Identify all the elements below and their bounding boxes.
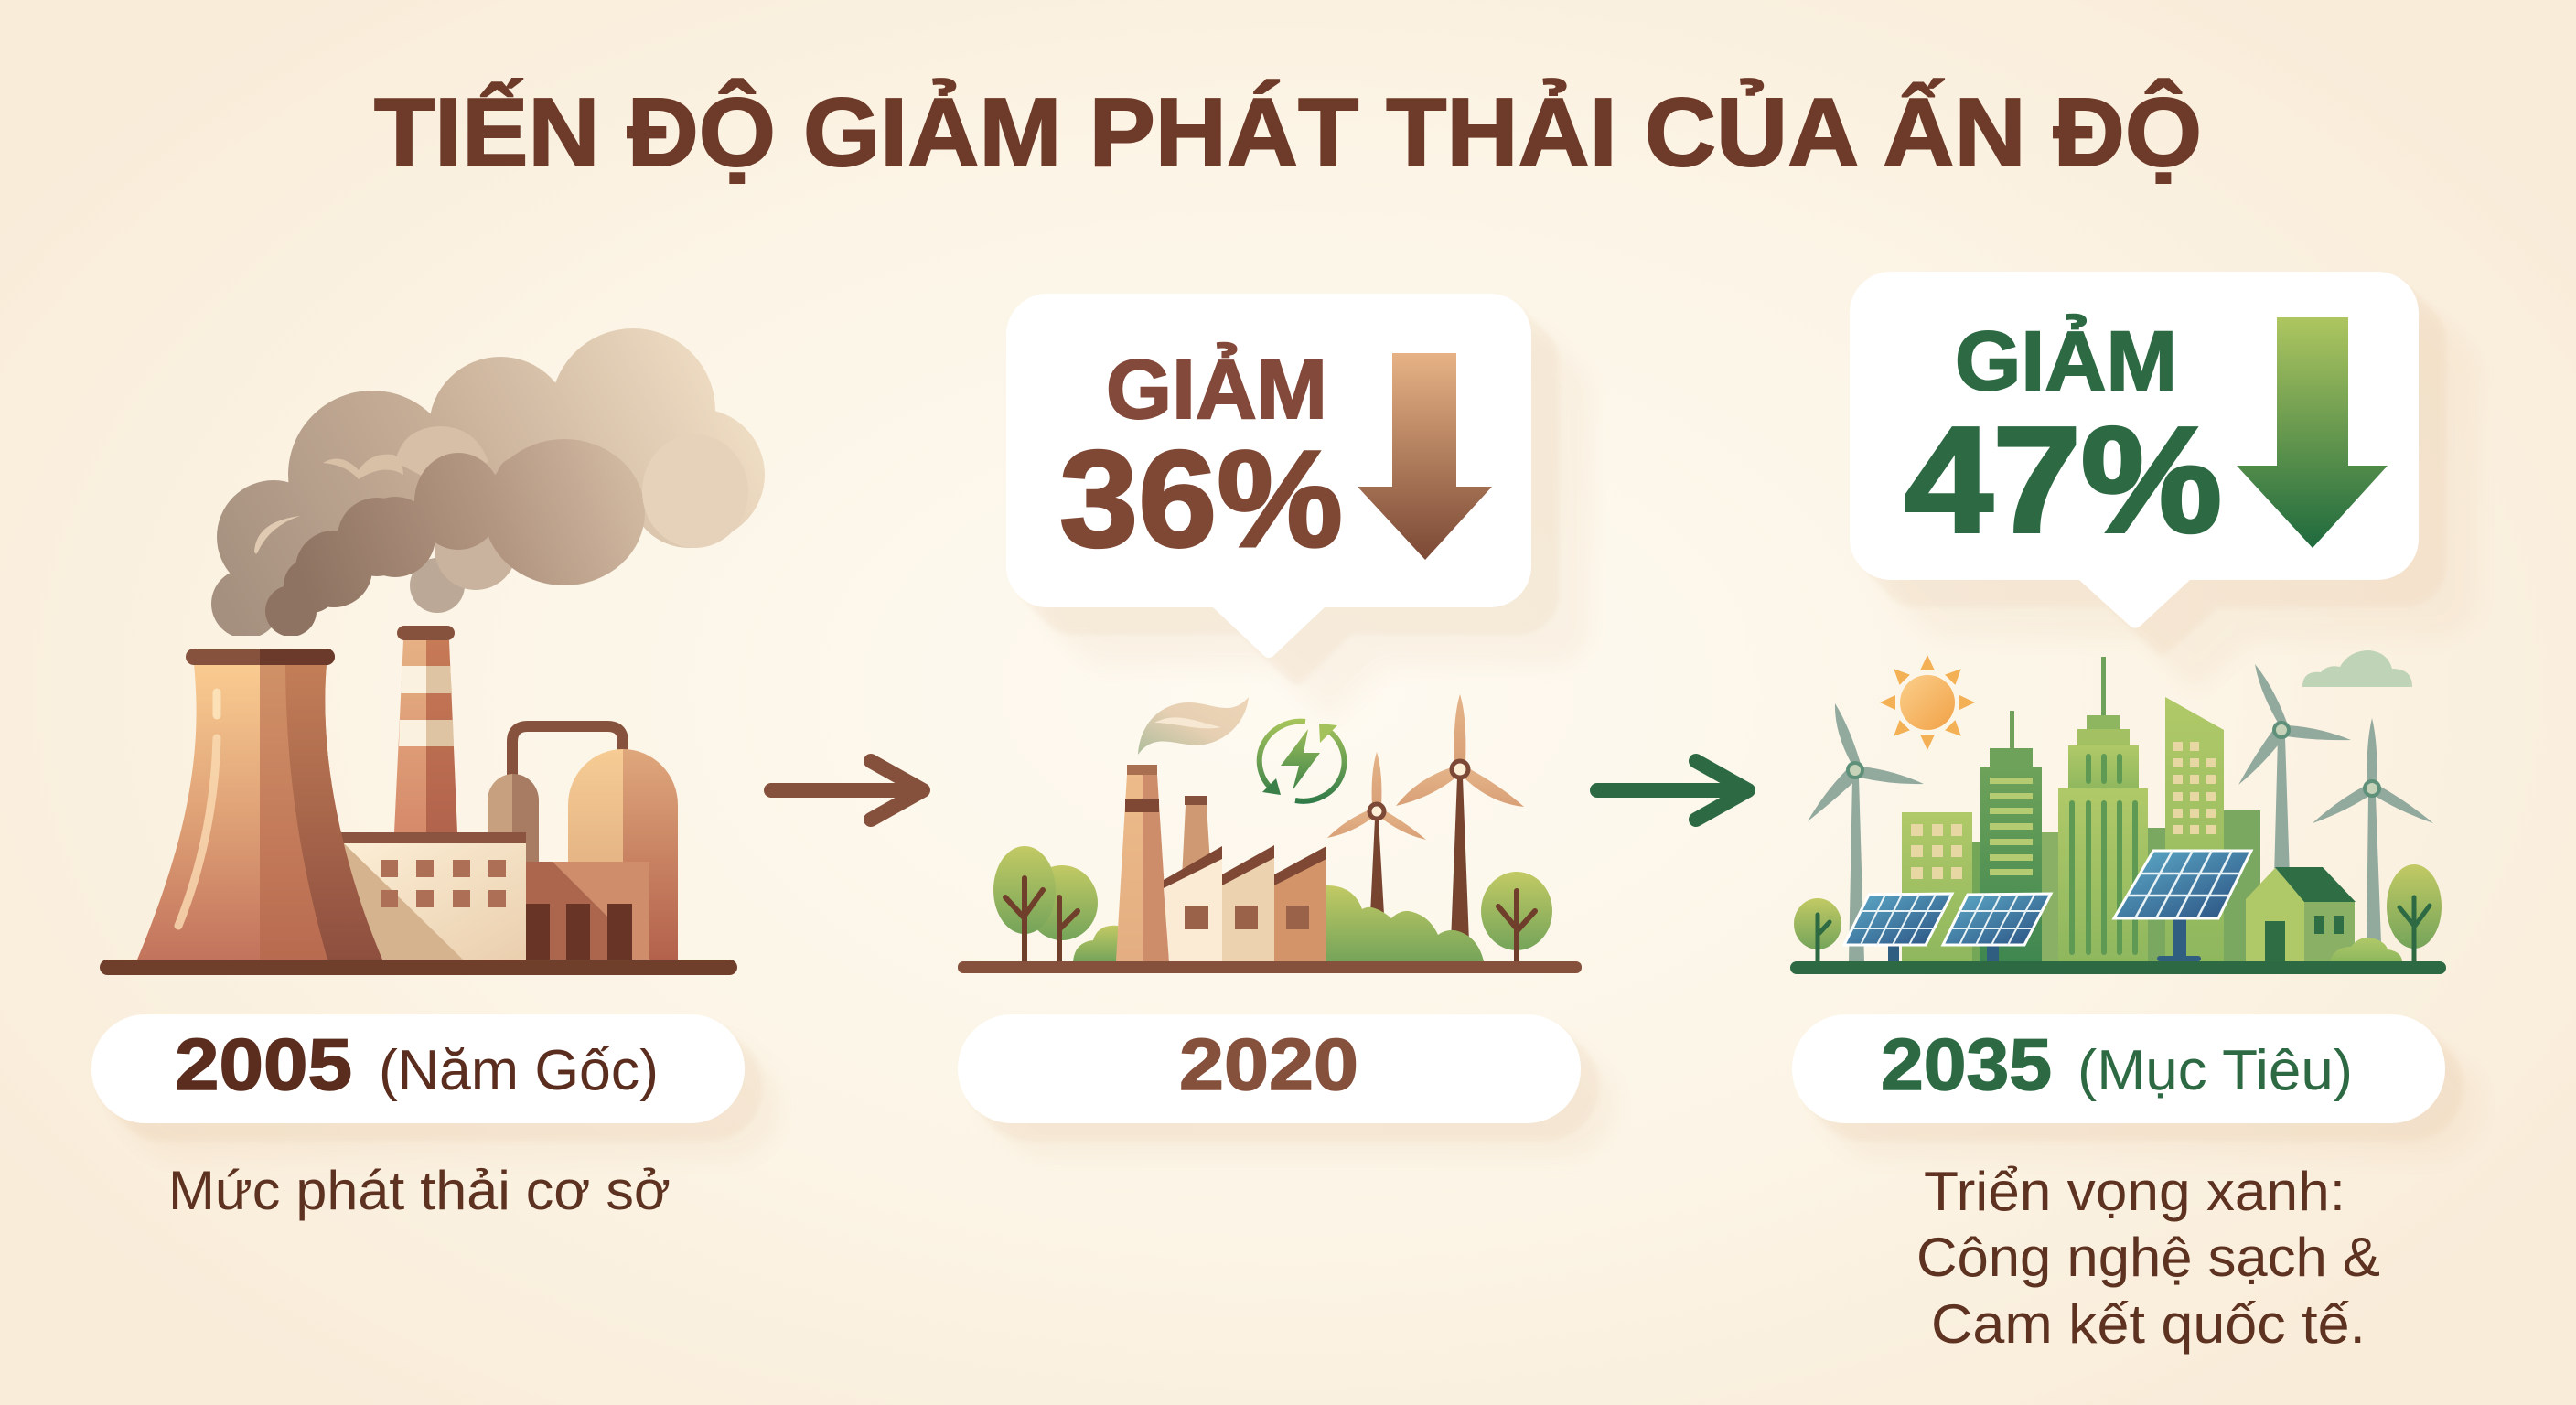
callout: giảm 47%: GIẢM [1955, 314, 2177, 408]
ground line 2035 [1790, 961, 2446, 974]
illustration: pipe and tanks [488, 726, 678, 960]
ground line 2020 [958, 961, 1582, 973]
building: low block [1902, 812, 1972, 961]
year pill 2035: 2035 [1881, 1024, 2052, 1105]
illustration: factory building [316, 832, 649, 960]
illustration: bushes [1073, 885, 1484, 961]
building: central skyscraper [2058, 657, 2148, 961]
illustration: house [2246, 867, 2356, 961]
icon: cloud [2302, 650, 2412, 687]
illustration: trees and bush [1794, 864, 2442, 961]
panel: 2020 [958, 294, 1617, 1160]
illustration: trees [993, 846, 1552, 961]
icon: renewable energy cycle [1260, 722, 1344, 801]
illustration: smoke wisp [1138, 697, 1249, 755]
illustration: striped chimney [394, 626, 457, 832]
year pill 2020: 2020 [1179, 1024, 1358, 1105]
building: slanted roof [2165, 697, 2224, 961]
illustration: cooling tower [137, 649, 382, 960]
description 2035: Cam kết quốc tế. [1931, 1293, 2366, 1355]
year pill 2005: (Năm Gốc) [379, 1039, 659, 1102]
description 2035: Công nghệ sạch & [1916, 1227, 2380, 1288]
panel: 2035 target [1790, 272, 2482, 1355]
illustration: green factory [1116, 765, 1326, 961]
description 2005: Mức phát thải cơ sở [168, 1160, 671, 1221]
callout: giảm 36% [1006, 294, 1592, 718]
illustration: wind turbines [1808, 664, 2433, 961]
title: TIẾN ĐỘ GIẢM PHÁT THẢI CỦA ẤN ĐỘ [374, 78, 2202, 187]
callout: giảm 36%: 36% [1059, 422, 1343, 575]
ground line 2005 [100, 960, 737, 975]
illustration: smoke cloud [211, 328, 765, 638]
panel: 2005 baseline [91, 328, 781, 1221]
illustration: solar panels [1844, 851, 2251, 961]
building: striped tower [1980, 711, 2042, 961]
illustration: wind turbines [1327, 694, 1524, 942]
year pill 2005: 2005 [175, 1024, 352, 1105]
icon: sun [1880, 655, 1975, 750]
arrow: 2020 to 2035 [1597, 761, 1748, 820]
description 2035 [1916, 1161, 2380, 1355]
illustration: green city [1902, 657, 2260, 961]
arrow: 2005 to 2020 [771, 761, 923, 820]
year pill 2005 [91, 1014, 781, 1160]
description 2035: Triển vọng xanh: [1924, 1161, 2345, 1222]
callout: giảm 36%: GIẢM [1106, 342, 1327, 436]
callout: giảm 47%: 47% [1905, 396, 2222, 563]
year pill 2020 [958, 1014, 1617, 1160]
year pill 2035: (Mục Tiêu) [2077, 1039, 2353, 1102]
year pill 2035 [1792, 1014, 2482, 1160]
callout: giảm 47% [1850, 272, 2479, 688]
